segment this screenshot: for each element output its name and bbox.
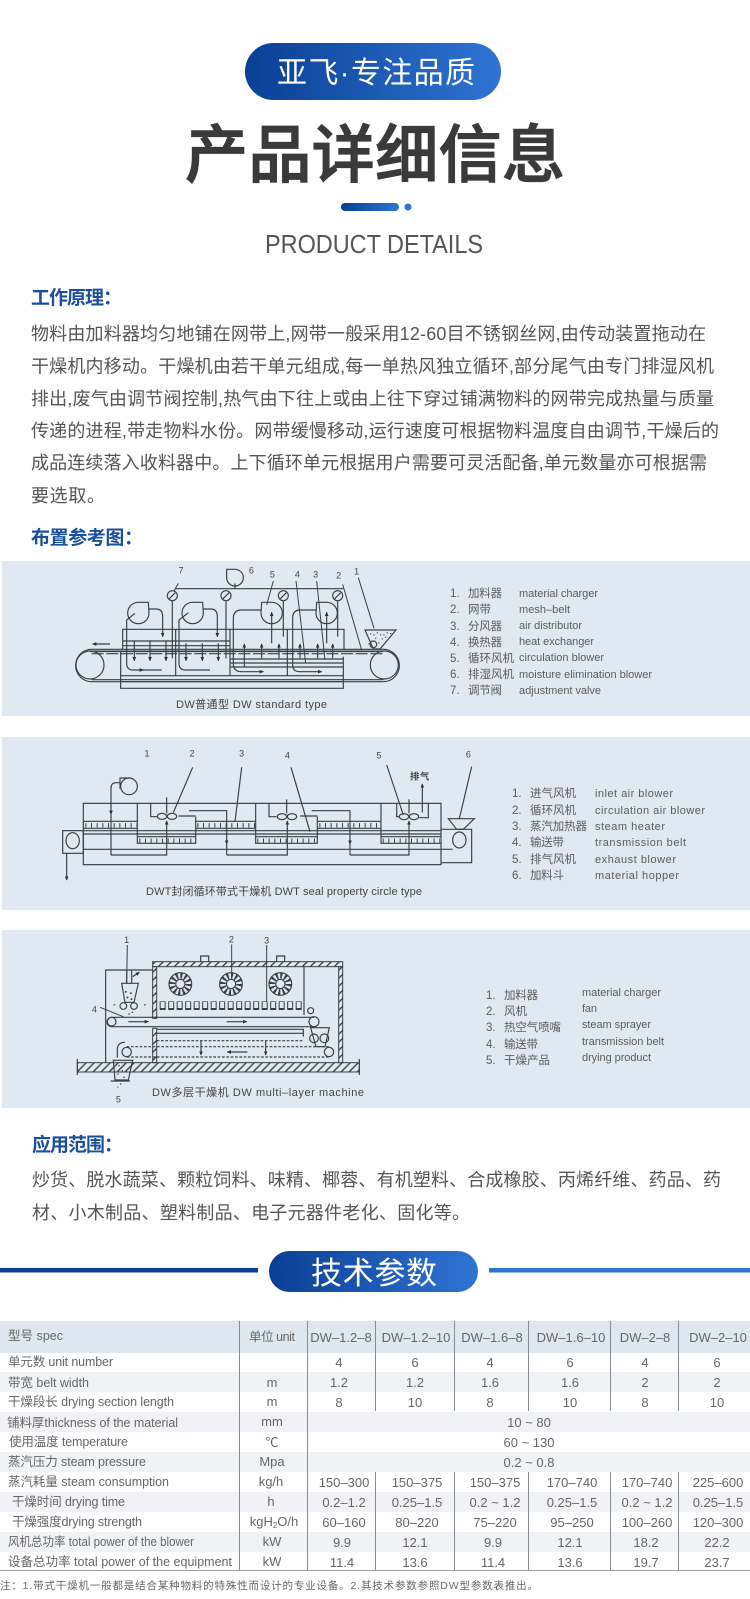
diagram: multi-layer dryer: 2: [229, 934, 234, 944]
row: drying strength: kgH: [250, 1514, 273, 1529]
legend: 干燥产品: [504, 1053, 550, 1067]
legend: 5.: [486, 1055, 496, 1067]
legend: [486, 987, 664, 1067]
text block: applications: 材、小木制品、塑料制品、电子元器件老化、固化等。: [32, 1203, 470, 1223]
row: unit number: [8, 1354, 721, 1370]
row: steam consumption: 蒸汽耗量 steam consumption: [8, 1474, 169, 1489]
row: belt width: 1.2: [330, 1375, 348, 1390]
heading: 应用范围: 应用范围：: [32, 1133, 123, 1156]
row: steam consumption: [8, 1474, 743, 1490]
legend: 4.: [486, 1039, 496, 1051]
caption: DWT封闭循环带式干燥机 DWT seal property circle type: [146, 884, 422, 898]
table header row: [8, 1329, 747, 1345]
row: total power of the blower: 22.2: [704, 1535, 730, 1550]
row: drying time: 0.2 ~ 1.2: [622, 1495, 672, 1510]
legend: 2.: [486, 1006, 496, 1018]
row: belt width: 1.6: [561, 1375, 579, 1390]
row: total power of the equipment: 19.7: [633, 1555, 659, 1570]
diagram: standard type dryer: 1: [354, 566, 359, 576]
legend: circulation air blower: [595, 805, 705, 817]
table header row: DW–1.2–8: [310, 1330, 372, 1345]
row: total power of the equipment: kW: [263, 1554, 282, 1569]
diagram: DWT closed circulation dryer: [63, 749, 474, 880]
legend: 网带: [468, 603, 491, 616]
legend: [512, 786, 705, 882]
row: steam consumption: 150–375: [470, 1475, 520, 1490]
legend: 3.: [486, 1022, 496, 1034]
legend: 2.: [450, 604, 460, 616]
text block: working principle: 成品连续落入收料器中。上下循环单元根据用户需要可灵活配备,单元数量亦可根据需: [31, 453, 707, 473]
row: total power of the blower: 9.9: [484, 1535, 502, 1550]
row: thickness of the material: 铺料厚thickness of the material: [7, 1416, 178, 1430]
section header: 技术参数: [0, 1248, 750, 1293]
row: drying section length: 干燥段长 drying section length: [8, 1394, 174, 1409]
legend: 输送带: [530, 835, 564, 849]
row: steam pressure: Mpa: [259, 1454, 285, 1469]
legend: 3.: [450, 621, 460, 633]
diagram: standard type dryer: 6: [249, 565, 254, 575]
row: total power of the equipment: 23.7: [704, 1555, 730, 1570]
row: drying section length: [8, 1394, 724, 1410]
title: 产品详细信息: [185, 105, 565, 196]
legend: 调节阀: [468, 683, 502, 697]
panel: DWT seal property circle type: [2, 737, 750, 910]
diagram: standard type dryer: 7: [178, 565, 183, 575]
caption: DW多层干燥机 DW multi–layer machine: [152, 1085, 364, 1099]
legend: 加料器: [468, 586, 502, 600]
diagram: DWT closed circulation dryer: 排气: [410, 770, 430, 781]
legend: 热空气喷嘴: [504, 1020, 562, 1034]
row: drying section length: 8: [335, 1395, 343, 1410]
row: drying strength: 60–160: [322, 1515, 366, 1530]
row: total power of the blower: 12.1: [557, 1535, 583, 1550]
legend: 排湿风机: [468, 667, 514, 681]
table header row: DW–1.6–10: [537, 1330, 605, 1345]
row: belt width: 带宽 belt width: [8, 1375, 89, 1390]
caption: DW普通型 DW standard type: [176, 697, 327, 711]
legend: steam sprayer: [582, 1019, 651, 1031]
table header row: DW–2–10: [689, 1330, 747, 1345]
row: thickness of the material: mm: [261, 1414, 283, 1429]
heading: 布置参考图: 布置参考图：: [31, 526, 143, 549]
row: total power of the equipment: 13.6: [557, 1555, 583, 1570]
legend: 5.: [450, 653, 460, 665]
text block: working principle: 排出,废气由调节阀控制,热气由下往上或由上往下穿过铺满物料的网带完成热量与质量: [31, 389, 714, 409]
diagram: multi-layer dryer: 4: [92, 1005, 97, 1015]
row: steam pressure: 0.2 ~ 0.8: [504, 1455, 554, 1470]
row: drying section length: 10: [408, 1395, 422, 1410]
table header row: 单位 unit: [249, 1329, 296, 1344]
row: unit number: 4: [335, 1355, 343, 1370]
row: drying strength: 100–260: [622, 1515, 672, 1530]
legend: 循环风机: [530, 803, 576, 817]
legend: transmission belt: [595, 837, 686, 849]
legend: material hopper: [595, 870, 679, 882]
row: drying strength: [12, 1514, 743, 1530]
diagram: DWT closed circulation dryer: 1: [144, 749, 149, 759]
legend: 3.: [512, 821, 522, 833]
row: temperature: 60 ~ 130: [504, 1435, 554, 1450]
legend: heat exchanger: [519, 636, 594, 648]
legend: circulation blower: [519, 652, 604, 664]
row: unit number: 6: [713, 1355, 721, 1370]
legend: 2.: [512, 805, 522, 817]
row: temperature: [9, 1434, 554, 1450]
footnote: 注：1.带式干燥机一般都是结合某种物料的特殊性而设计的专业设备。2.其技术参数参照DW型参数表推出。: [0, 1579, 538, 1592]
legend: 加料斗: [530, 868, 564, 882]
row: drying strength: 75–220: [473, 1515, 517, 1530]
legend: 输送带: [504, 1037, 538, 1051]
row: total power of the equipment: 设备总功率 total power of the equipment: [8, 1554, 233, 1569]
legend: steam heater: [595, 821, 665, 833]
row: unit number: 4: [641, 1355, 649, 1370]
legend: 4.: [450, 637, 460, 649]
diagram: standard type dryer: 3: [313, 570, 318, 580]
row: steam consumption: kg/h: [259, 1474, 283, 1489]
heading: 工作原理: 工作原理：: [31, 287, 122, 309]
row: total power of the equipment: 11.4: [330, 1555, 354, 1570]
row: steam consumption: 150–300: [319, 1475, 369, 1490]
panel: DW multi-layer machine: [2, 930, 750, 1108]
diagram: DWT closed circulation dryer: 6: [466, 749, 471, 759]
row: steam pressure: 蒸汽压力 steam pressure: [8, 1454, 146, 1469]
diagram: multi-layer dryer: 1: [124, 935, 129, 945]
legend: air distributor: [519, 620, 582, 632]
row: belt width: [8, 1375, 721, 1390]
legend: 6.: [512, 870, 522, 882]
row: total power of the blower: 12.1: [402, 1535, 428, 1550]
row: steam consumption: 170–740: [547, 1475, 597, 1490]
table header row: DW–1.6–8: [461, 1330, 523, 1345]
row: drying time: 0.25–1.5: [392, 1495, 442, 1510]
row: belt width: 2: [713, 1375, 721, 1390]
diagram: DWT closed circulation dryer: 3: [239, 749, 244, 759]
diagram: multi-layer dryer: 5: [116, 1094, 121, 1104]
subtitle: PRODUCT DETAILS: [265, 229, 483, 259]
legend: exhaust blower: [595, 854, 676, 866]
row: total power of the blower: 9.9: [333, 1535, 351, 1550]
table header row: DW–1.2–10: [382, 1330, 450, 1345]
row: belt width: 2: [641, 1375, 649, 1390]
diagram: DWT closed circulation dryer: 2: [189, 749, 194, 759]
row: drying section length: 8: [486, 1395, 494, 1410]
diagram: standard type dryer: 4: [295, 570, 300, 580]
text block: applications: [32, 1170, 721, 1223]
legend: adjustment valve: [519, 685, 601, 697]
row: drying section length: 10: [563, 1395, 577, 1410]
row: belt width: 1.6: [481, 1375, 499, 1390]
row: drying strength: 干燥强度drying strength: [12, 1514, 142, 1529]
badge: 亚飞·专注品质: 亚飞·专注品质: [277, 57, 475, 90]
row: unit number: 6: [566, 1355, 574, 1370]
row: steam consumption: 150–375: [392, 1475, 442, 1490]
legend: [450, 586, 652, 697]
row: steam consumption: 170–740: [622, 1475, 672, 1490]
text block: working principle: 物料由加料器均匀地铺在网带上,网带一般采用12-60目不锈钢丝网,由传动装置拖动在: [31, 324, 706, 344]
row: total power of the blower: 风机总功率 total power of the blower: [8, 1534, 194, 1549]
section header: 技术参数: 技术参数: [311, 1248, 437, 1293]
row: total power of the blower: [8, 1534, 730, 1550]
row: unit number: 4: [486, 1355, 494, 1370]
text block: working principle: 要选取。: [31, 486, 105, 506]
row: drying strength: O/h: [277, 1514, 298, 1529]
row: total power of the blower: kW: [263, 1534, 282, 1549]
legend: 7.: [450, 685, 460, 697]
legend: 6.: [450, 669, 460, 681]
row: steam pressure: [8, 1454, 554, 1470]
row: unit number: 6: [411, 1355, 419, 1370]
legend: moisture elimination blower: [519, 669, 652, 681]
table header row: 型号 spec: [8, 1329, 63, 1343]
row: drying strength: 95–250: [550, 1515, 594, 1530]
legend: 1.: [450, 588, 460, 600]
text block: working principle: 传递的进程,带走物料水份。网带缓慢移动,运行速度可根据物料温度自由调节,干燥后的: [31, 421, 719, 441]
legend: 分风器: [468, 620, 502, 633]
row: thickness of the material: [7, 1414, 551, 1430]
row: total power of the equipment: [8, 1554, 730, 1570]
table: technical parameters: [0, 1321, 750, 1571]
text block: working principle: [31, 324, 719, 506]
legend: 1.: [486, 990, 496, 1002]
row: drying time: 干燥时间 drying time: [12, 1495, 125, 1509]
legend: 排气风机: [530, 852, 576, 866]
row: drying section length: 8: [641, 1395, 649, 1410]
panel: DW standard type: [2, 561, 750, 716]
row: temperature: ℃: [265, 1435, 279, 1450]
diagram: standard type dryer: 2: [336, 570, 341, 580]
text block: applications: 炒货、脱水蔬菜、颗粒饲料、味精、椰蓉、有机塑料、合成橡胶、丙烯纤维、药品、药: [32, 1170, 721, 1190]
legend: material charger: [519, 588, 598, 600]
legend: 蒸汽加热器: [530, 819, 588, 833]
badge: 亚飞·专注品质: [245, 43, 501, 100]
legend: transmission belt: [582, 1036, 664, 1048]
text block: working principle: 干燥机内移动。干燥机由若干单元组成,每一单热风独立循环,部分尾气由专门排湿风机: [31, 356, 714, 376]
diagram: DWT closed circulation dryer: 5: [376, 750, 381, 760]
row: drying time: [12, 1494, 743, 1510]
row: drying section length: m: [267, 1394, 277, 1409]
row: unit number: 单元数 unit number: [8, 1354, 113, 1369]
legend: inlet air blower: [595, 788, 673, 800]
legend: 风机: [504, 1004, 527, 1018]
row: drying strength: 80–220: [395, 1515, 439, 1530]
legend: 5.: [512, 854, 522, 866]
diagram: standard type dryer: 5: [270, 570, 275, 580]
row: belt width: m: [267, 1375, 277, 1390]
legend: 进气风机: [530, 786, 576, 800]
row: drying time: 0.2–1.2: [322, 1495, 366, 1510]
legend: mesh–belt: [519, 604, 570, 616]
diagram: DWT closed circulation dryer: 4: [285, 750, 290, 760]
row: total power of the equipment: 13.6: [402, 1555, 428, 1570]
diagram: multi-layer dryer: [77, 934, 359, 1104]
row: total power of the equipment: 11.4: [481, 1555, 505, 1570]
diagram: multi-layer dryer: 3: [264, 935, 269, 945]
row: drying strength: 120–300: [693, 1515, 743, 1530]
row: drying section length: 10: [710, 1395, 724, 1410]
row: steam consumption: 225–600: [693, 1475, 743, 1490]
row: drying time: h: [267, 1494, 275, 1509]
legend: 加料器: [504, 988, 538, 1002]
legend: 循环风机: [468, 651, 514, 665]
table header row: DW–2–8: [620, 1330, 670, 1345]
row: drying time: 0.25–1.5: [547, 1495, 597, 1510]
row: drying time: 0.25–1.5: [693, 1495, 743, 1510]
legend: 1.: [512, 788, 522, 800]
row: drying strength: 2: [273, 1521, 278, 1530]
row: thickness of the material: 10 ~ 80: [507, 1415, 551, 1430]
legend: fan: [582, 1003, 597, 1015]
title accent bar and dot: [341, 203, 412, 211]
legend: 换热器: [468, 635, 502, 649]
row: drying time: 0.2 ~ 1.2: [470, 1495, 520, 1510]
legend: drying product: [582, 1052, 651, 1064]
row: temperature: 使用温度 temperature: [9, 1434, 128, 1449]
diagram: standard type dryer: [76, 565, 399, 688]
row: total power of the blower: 18.2: [633, 1535, 659, 1550]
legend: 4.: [512, 837, 522, 849]
row: belt width: 1.2: [406, 1375, 424, 1390]
legend: material charger: [582, 987, 661, 999]
